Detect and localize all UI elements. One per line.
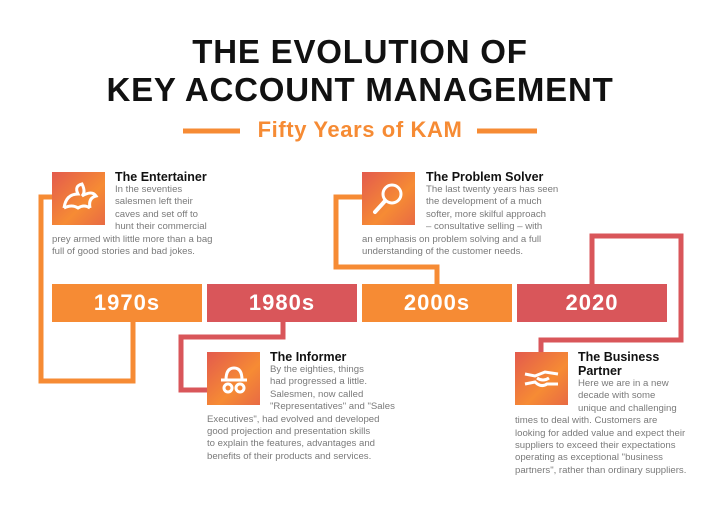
heading: business partner bbox=[578, 350, 659, 378]
text: business partner: decade with some bbox=[578, 390, 655, 401]
text: informer: By the eighties, things bbox=[270, 364, 364, 375]
bar: 2000s bbox=[362, 284, 512, 322]
text: informer: "Representatives" and "Sales bbox=[270, 401, 395, 412]
text: entertainer: full of good stories and bad jokes. bbox=[52, 246, 195, 257]
text: business partner: suppliers to exceed their expectations bbox=[515, 440, 676, 451]
icon: jester hat bbox=[52, 172, 105, 225]
text: problem solver: softer, more skilful approach bbox=[426, 209, 546, 220]
text: entertainer: hunt their commercial bbox=[115, 221, 207, 232]
text: business partner: unique and challenging bbox=[578, 403, 677, 414]
text: problem solver: an emphasis on problem solving and a full bbox=[362, 234, 541, 245]
text: informer: to explain the features, advantages and bbox=[207, 438, 375, 449]
icon: magnifier bbox=[362, 172, 415, 225]
text: business partner: times to deal with. Customers are bbox=[515, 415, 657, 426]
text: problem solver bbox=[362, 184, 558, 257]
heading: informer: The Informer bbox=[270, 350, 346, 364]
text: business partner: Here we are in a new bbox=[578, 378, 669, 389]
text: problem solver: – consultative selling – with bbox=[426, 221, 542, 232]
heading: entertainer: The Entertainer bbox=[115, 170, 207, 184]
title bbox=[106, 33, 614, 108]
bar: 1980s bbox=[207, 284, 357, 322]
title: KEY ACCOUNT MANAGEMENT bbox=[106, 71, 614, 108]
bar: 1970s: 1970s bbox=[94, 290, 160, 315]
icon: handshake bbox=[515, 352, 568, 405]
heading: business partner: The Business bbox=[578, 350, 659, 364]
text: business partner: looking for added value and expect their bbox=[515, 428, 685, 439]
text: entertainer: In the seventies bbox=[115, 184, 182, 195]
heading: business partner: Partner bbox=[578, 364, 622, 378]
text: entertainer: prey armed with little more than a bag bbox=[52, 234, 213, 245]
subtitle: Fifty Years of KAM bbox=[258, 117, 462, 142]
bar: 2000s: 2000s bbox=[404, 290, 470, 315]
text: problem solver: The last twenty years has seen bbox=[426, 184, 558, 195]
text: problem solver: understanding of the customer needs. bbox=[362, 246, 523, 257]
bar: 1970s bbox=[52, 284, 202, 322]
text: informer bbox=[207, 364, 395, 462]
text: business partner bbox=[515, 378, 686, 476]
text: entertainer: caves and set off to bbox=[115, 209, 198, 220]
bar: 2020 bbox=[517, 284, 667, 322]
text: informer: good projection and presentation skills bbox=[207, 426, 370, 437]
text: business partner: partners", rather than ordinary suppliers. bbox=[515, 465, 686, 476]
text: entertainer: salesmen left their bbox=[115, 196, 193, 207]
title: THE EVOLUTION OF bbox=[192, 33, 528, 70]
text: informer: had progressed a little. bbox=[270, 376, 367, 387]
bar: 1980s: 1980s bbox=[249, 290, 315, 315]
text: informer: Executives", had evolved and developed bbox=[207, 414, 379, 425]
bar: 2020: 2020 bbox=[566, 290, 618, 315]
text: informer: benefits of their products and services. bbox=[207, 451, 371, 462]
text: problem solver: the development of a much bbox=[426, 196, 542, 207]
text: informer: Salesmen, now called bbox=[270, 389, 363, 400]
heading: problem solver: The Problem Solver bbox=[426, 170, 543, 184]
text: business partner: operating as exceptional "business bbox=[515, 452, 663, 463]
text: entertainer bbox=[52, 184, 213, 257]
icon: spy bbox=[207, 352, 260, 405]
